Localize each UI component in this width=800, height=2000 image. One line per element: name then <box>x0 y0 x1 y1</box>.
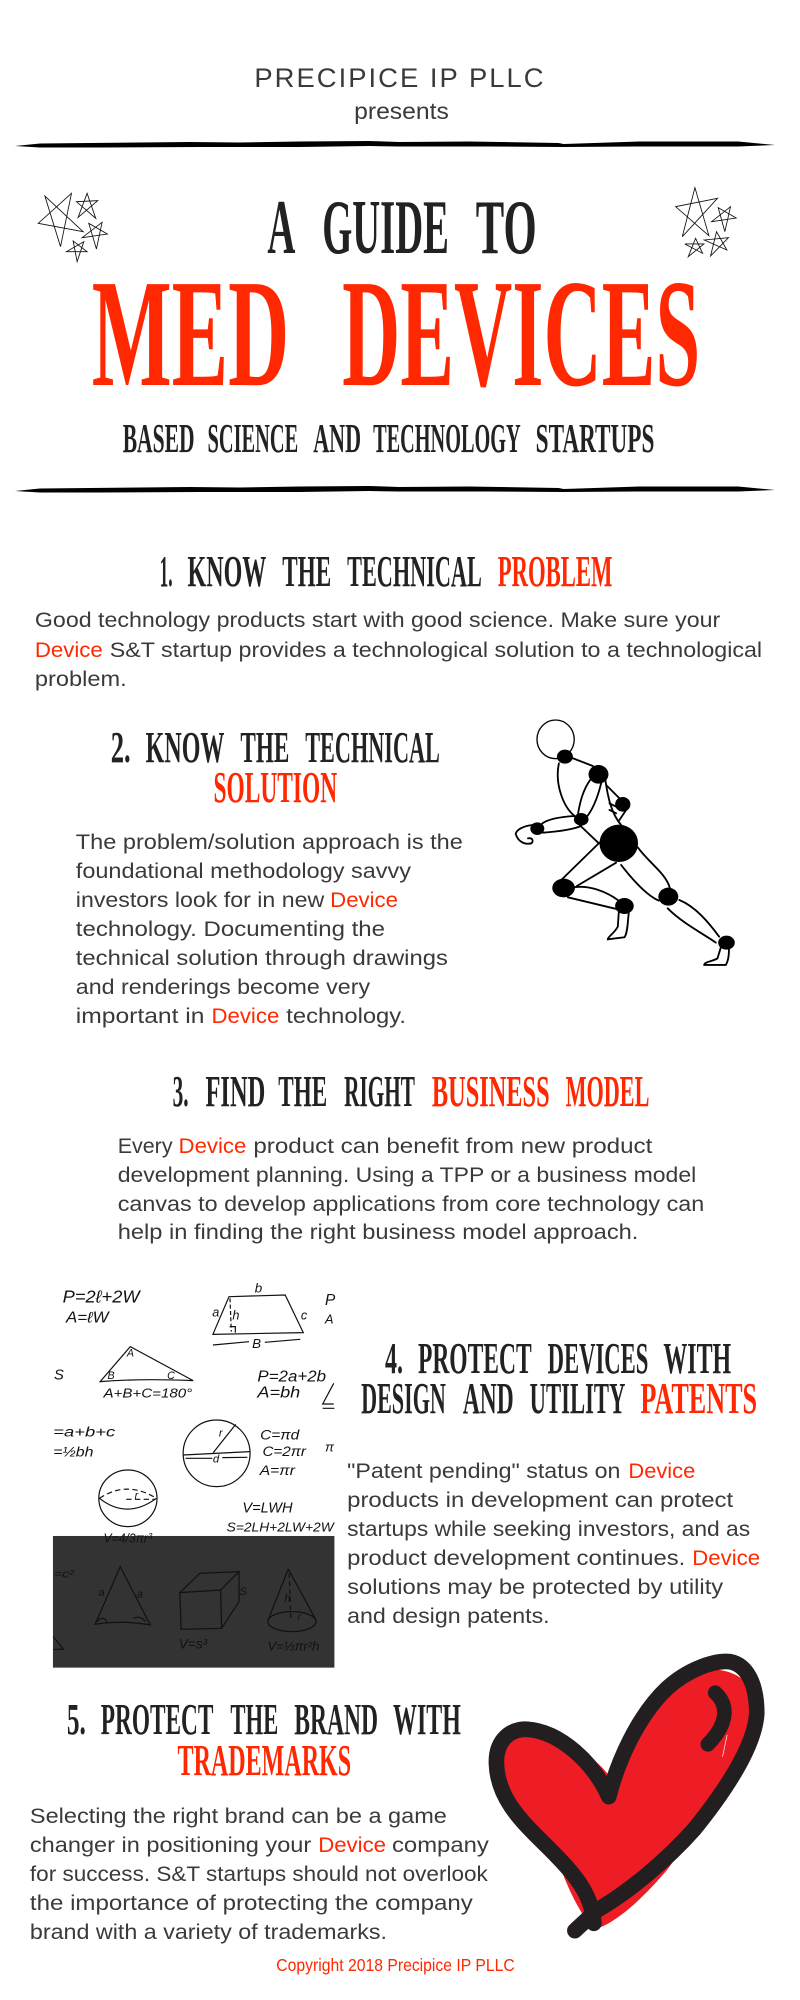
image: geometry formulas chalkboard: S <box>239 1586 247 1598</box>
body text 3: canvas to develop applications from core technology can <box>118 1193 704 1216</box>
dark lower band <box>53 1536 334 1668</box>
panel: section 3 <box>118 1067 704 1244</box>
body text 2 <box>76 831 463 1028</box>
image: geometry formulas chalkboard: A+B+C=180° <box>102 1385 193 1400</box>
copyright footer: Copyright 2018 Precipice IP PLLC <box>276 1955 515 1975</box>
body text 5: Selecting the right brand can be a game <box>30 1805 447 1828</box>
body text 3 <box>118 1135 704 1244</box>
body text 5: Device <box>318 1834 386 1857</box>
subtitle: BASED <box>123 416 195 461</box>
image: geometry formulas chalkboard: P=2a+2b <box>257 1369 327 1386</box>
body text 2: Device <box>330 889 398 912</box>
image: geometry formulas chalkboard: A=ℓW <box>65 1310 110 1327</box>
body text 4: Device <box>628 1460 695 1483</box>
heading 1: KNOW <box>188 547 266 596</box>
panel: section 4 <box>53 1281 760 1668</box>
icon: running figure <box>516 720 735 965</box>
body text 5: company <box>392 1834 489 1857</box>
heading 3 <box>173 1067 649 1116</box>
image: geometry formulas chalkboard: =½bh <box>53 1444 94 1460</box>
subtitle: SCIENCE <box>207 416 298 461</box>
title: med devices: MED <box>92 249 289 419</box>
body text 3: product can benefit from new product <box>253 1135 653 1158</box>
heading 5: THE <box>230 1695 278 1744</box>
image: geometry formulas chalkboard: a <box>137 1588 143 1600</box>
body text 4: and design patents. <box>347 1605 550 1628</box>
body text 2: investors look for in new <box>76 889 325 912</box>
body text 1: S&T startup provides a technological solution to a technological <box>110 639 762 662</box>
image: geometry formulas chalkboard: d <box>213 1453 220 1465</box>
subtitle: TECHNOLOGY <box>373 416 521 461</box>
image: geometry formulas chalkboard: P=2ℓ+2W <box>63 1287 141 1307</box>
body text 4: solutions may be protected by utility <box>347 1576 724 1599</box>
body text 2: technology. Documenting the <box>76 918 385 941</box>
heading 4: DEVICES <box>548 1334 648 1383</box>
subtitle: AND <box>313 416 361 461</box>
body text 5 <box>30 1805 489 1944</box>
header: presents: presents <box>354 98 449 124</box>
body text 2: technology. <box>286 1005 406 1028</box>
heading 1: PROBLEM <box>498 547 612 596</box>
body text 3: Device <box>179 1135 246 1158</box>
heading 1: THE <box>282 547 331 596</box>
heading 2: TECHNICAL <box>305 723 440 772</box>
subtitle: STARTUPS <box>536 416 654 461</box>
body text 5: the importance of protecting the company <box>30 1892 473 1915</box>
body text 2: important in <box>76 1005 204 1028</box>
image: geometry formulas chalkboard: C=πd <box>260 1426 301 1442</box>
icon: red heart <box>496 1661 757 1931</box>
subtitle <box>123 416 654 461</box>
body text 4: "Patent pending" status on <box>347 1460 620 1483</box>
image: geometry formulas chalkboard: V=LWH <box>242 1501 293 1517</box>
heading 5: 5. <box>67 1695 86 1744</box>
image: geometry formulas chalkboard: B <box>108 1370 115 1382</box>
body text 4: products in development can protect <box>347 1489 733 1512</box>
image: geometry formulas chalkboard: S <box>54 1367 64 1383</box>
image: geometry formulas chalkboard: a <box>212 1306 219 1320</box>
image: geometry formulas chalkboard: c <box>301 1308 308 1322</box>
image: geometry formulas chalkboard: r <box>135 1490 139 1502</box>
heading 2: 2. <box>111 723 131 772</box>
image: geometry formulas chalkboard: V=4/3πr³ <box>103 1531 153 1546</box>
heading 4: PROTECT <box>418 1334 532 1383</box>
heading 4: WITH <box>663 1334 731 1383</box>
image: geometry formulas chalkboard: =c² <box>54 1568 76 1580</box>
body text 2: and renderings become very <box>76 976 371 999</box>
body text 4: Device <box>692 1547 760 1570</box>
body text 3: help in finding the right business model approach. <box>118 1221 638 1244</box>
heading 1: 1. <box>160 547 173 596</box>
image: geometry formulas chalkboard: r <box>298 1612 302 1623</box>
image: geometry formulas chalkboard: A <box>324 1312 334 1326</box>
image: geometry formulas chalkboard: V=s³ <box>179 1635 208 1651</box>
heading 4: 4. <box>385 1334 403 1383</box>
title: a guide to: A <box>267 184 295 270</box>
heading 3: BUSINESS <box>432 1067 550 1116</box>
body text 5: for success. S&T startups should not overlook <box>30 1863 488 1886</box>
body text 1: Good technology products start with good science. Make sure your <box>35 609 720 632</box>
image: geometry formulas chalkboard: S=2LH+2LW+2W <box>227 1520 335 1535</box>
heading 4: DESIGN <box>361 1374 446 1423</box>
icon: stars right <box>676 188 736 257</box>
image: geometry formulas chalkboard: A=bh <box>256 1384 300 1401</box>
image: geometry formulas chalkboard: b <box>255 1281 263 1296</box>
image: geometry formulas chalkboard: π <box>325 1440 335 1455</box>
heading 5: BRAND <box>294 1695 378 1744</box>
image: geometry formulas chalkboard: h <box>232 1308 239 1322</box>
title: a guide to: TO <box>476 184 537 270</box>
body text 4: product development continues. <box>347 1547 685 1570</box>
body text 5: changer in positioning your <box>30 1834 311 1857</box>
image: geometry formulas chalkboard: P <box>325 1292 336 1309</box>
body text 2: technical solution through drawings <box>76 947 448 970</box>
panel: section 2 <box>76 720 735 1028</box>
heading 5: TRADEMARKS <box>178 1736 351 1785</box>
heading 5 <box>67 1695 461 1785</box>
body text 3: Every <box>118 1135 173 1158</box>
heading 2: SOLUTION <box>213 763 337 812</box>
image: geometry formulas chalkboard: h <box>285 1593 291 1605</box>
heading 1 <box>160 547 612 596</box>
body text 2: foundational methodology savvy <box>76 860 412 883</box>
body text 4: startups while seeking investors, and as <box>347 1518 750 1541</box>
image: geometry formulas chalkboard: r <box>219 1428 224 1440</box>
image: geometry formulas chalkboard: C=2πr <box>262 1443 307 1459</box>
image: geometry formulas chalkboard: V=⅓πr²h <box>267 1640 319 1654</box>
body text 1: Device <box>35 639 103 662</box>
body text 3: development planning. Using a TPP or a business model <box>118 1164 696 1187</box>
heading 4 <box>361 1334 757 1423</box>
heading 3: 3. <box>173 1067 189 1116</box>
panel: section 5 <box>30 1661 757 1944</box>
header: company name: PRECIPICE IP PLLC <box>254 63 546 93</box>
heading 5: PROTECT <box>101 1695 213 1744</box>
image: geometry formulas chalkboard: a <box>99 1587 105 1599</box>
title: med devices <box>92 249 700 419</box>
heading 2: KNOW <box>146 723 224 772</box>
heading 5: WITH <box>393 1695 461 1744</box>
heading 3: MODEL <box>566 1067 649 1116</box>
body text 5: brand with a variety of trademarks. <box>30 1921 387 1944</box>
heading 4: UTILITY <box>530 1374 625 1423</box>
heading 3: FIND <box>205 1067 265 1116</box>
title: a guide to <box>267 184 537 270</box>
heading 1: TECHNICAL <box>347 547 482 596</box>
body text 1: problem. <box>35 668 127 691</box>
image: geometry formulas chalkboard: A <box>126 1348 134 1360</box>
brush divider top <box>15 141 775 148</box>
heading 2: THE <box>240 723 289 772</box>
image: geometry formulas chalkboard: A=πr <box>259 1462 296 1478</box>
body text 2: Device <box>211 1005 279 1028</box>
heading 4: AND <box>463 1374 514 1423</box>
body text 1 <box>35 609 762 691</box>
image: geometry formulas chalkboard: =a+b+c <box>53 1424 115 1440</box>
icon: stars left <box>38 193 107 262</box>
title: a guide to: GUIDE <box>322 184 449 270</box>
heading 3: RIGHT <box>344 1067 415 1116</box>
brush divider bottom <box>15 486 775 492</box>
heading 3: THE <box>278 1067 327 1116</box>
panel: section 1 <box>35 547 762 691</box>
heading 2 <box>111 723 440 812</box>
body text 2: The problem/solution approach is the <box>76 831 463 854</box>
image: geometry formulas chalkboard <box>53 1281 336 1668</box>
body text 4 <box>347 1460 760 1628</box>
image: geometry formulas chalkboard: B <box>252 1336 261 1351</box>
image: geometry formulas chalkboard: C <box>167 1370 175 1382</box>
